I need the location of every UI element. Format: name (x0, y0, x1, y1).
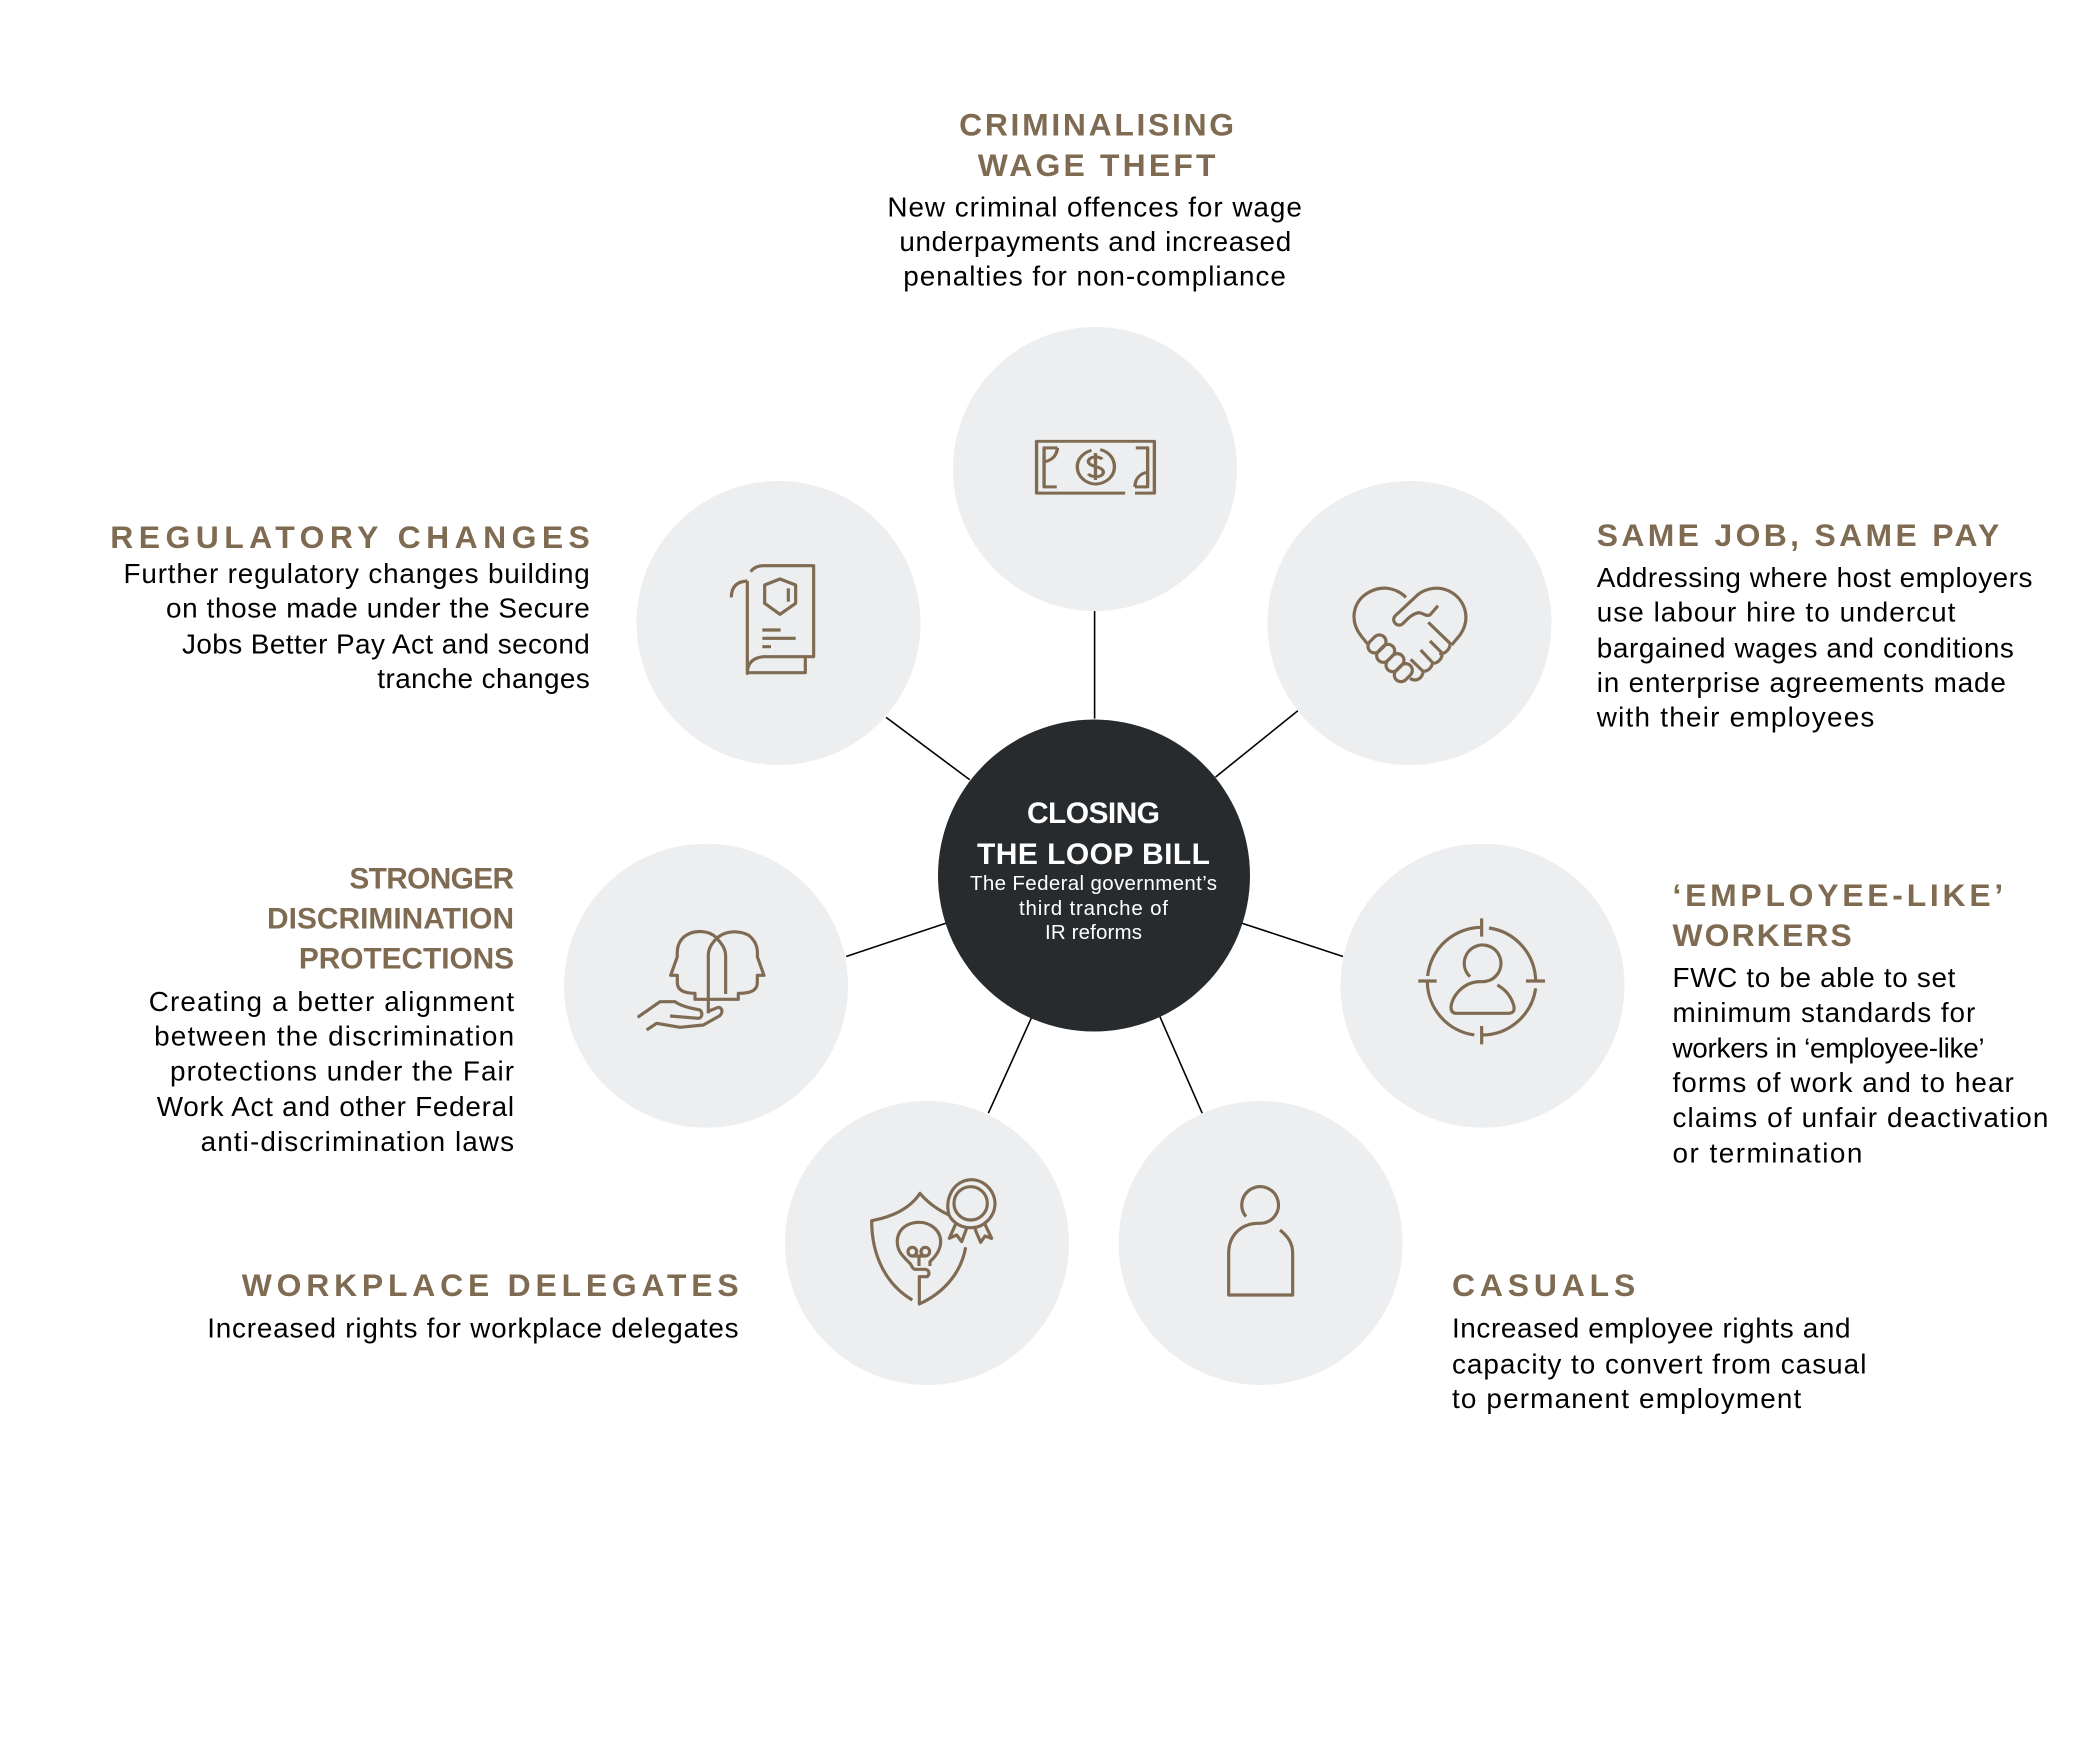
heading (1672, 877, 2003, 953)
hub title: THE LOOP BILL (977, 838, 1210, 871)
icon: handshake heart (1354, 588, 1466, 684)
circle (785, 1101, 1069, 1385)
body text: Increased rights for workplace delegates (207, 1313, 739, 1344)
body text: claims of unfair deactivation (1672, 1102, 2048, 1133)
circle (564, 844, 848, 1128)
heading: CRIMINALISING (959, 106, 1234, 142)
panel: stronger discrimination protections (149, 844, 848, 1157)
connector lines (846, 611, 1343, 1113)
hub circle (938, 720, 1250, 1032)
body text: New criminal offences for wage (887, 192, 1302, 223)
icon: two heads over hand (638, 931, 764, 1030)
panel: workplace delegates (207, 1101, 1069, 1385)
heading: WORKERS (1672, 917, 1852, 953)
body text (1452, 1313, 1866, 1414)
body text: use labour hire to undercut (1597, 597, 1956, 628)
panel: centre hub (938, 720, 1250, 1032)
body text (149, 986, 514, 1157)
body text: protections under the Fair (170, 1056, 514, 1087)
heading: ‘EMPLOYEE-LIKE’ (1672, 877, 2003, 913)
body text: Further regulatory changes building (124, 558, 590, 589)
body text: anti-discrimination laws (201, 1126, 514, 1157)
hub subtitle (970, 872, 1217, 944)
circle (1268, 481, 1552, 765)
heading: REGULATORY CHANGES (110, 519, 590, 555)
panel: same job, same pay (1268, 481, 2032, 765)
heading: CASUALS (1452, 1267, 1635, 1303)
circle (636, 481, 920, 765)
body text: penalties for non-compliance (903, 261, 1286, 292)
icon: book with shield (731, 566, 814, 673)
icon: shield, bulb and medal (872, 1180, 995, 1304)
icon: person in target (1418, 918, 1545, 1044)
body text (1671, 962, 2048, 1168)
body text: between the discrimination (154, 1020, 514, 1051)
icon: person (1229, 1187, 1293, 1295)
icon: banknote (1037, 441, 1154, 493)
hub title (977, 797, 1210, 871)
body text: in enterprise agreements made (1597, 667, 2006, 698)
body text: minimum standards for (1672, 997, 1975, 1028)
heading: STRONGER (349, 863, 514, 896)
panel: casuals (1119, 1101, 1866, 1414)
body text: Work Act and other Federal (157, 1091, 514, 1122)
heading (267, 863, 514, 975)
body text: on those made under the Secure (166, 593, 590, 624)
body text: FWC to be able to set (1672, 962, 1956, 993)
hub subtitle: IR reforms (1045, 921, 1142, 944)
body text (1596, 562, 2032, 733)
heading: SAME JOB, SAME PAY (1597, 517, 1999, 553)
panel: regulatory changes (110, 481, 920, 765)
heading: PROTECTIONS (299, 942, 514, 975)
heading (959, 106, 1234, 183)
body text: Addressing where host employers (1597, 562, 2032, 593)
body text: or termination (1672, 1137, 1862, 1168)
circle (1119, 1101, 1403, 1385)
panel: criminalising wage theft (887, 106, 1302, 611)
body text: underpayments and increased (899, 226, 1291, 257)
heading: WORKPLACE DELEGATES (242, 1267, 739, 1303)
body text: Increased employee rights and (1452, 1313, 1850, 1344)
body text: tranche changes (377, 663, 590, 694)
heading: DISCRIMINATION (267, 903, 514, 936)
hub title: CLOSING (1027, 797, 1160, 830)
body text: capacity to convert from casual (1452, 1349, 1866, 1380)
panel: employee-like workers (1340, 844, 2048, 1168)
body text: bargained wages and conditions (1597, 633, 2014, 664)
body text: with their employees (1596, 702, 1874, 733)
circle (953, 327, 1237, 611)
hub subtitle: The Federal government’s (970, 872, 1217, 895)
body text (887, 192, 1302, 292)
body text: Creating a better alignment (149, 986, 514, 1017)
circle (1340, 844, 1624, 1128)
body text (124, 558, 590, 694)
body text: Jobs Better Pay Act and second (182, 629, 590, 660)
body text: to permanent employment (1452, 1383, 1802, 1414)
body text: workers in ‘employee-like’ (1671, 1032, 1985, 1063)
heading: WAGE THEFT (978, 147, 1216, 183)
body text: forms of work and to hear (1672, 1067, 2014, 1098)
hub subtitle: third tranche of (1019, 897, 1168, 920)
